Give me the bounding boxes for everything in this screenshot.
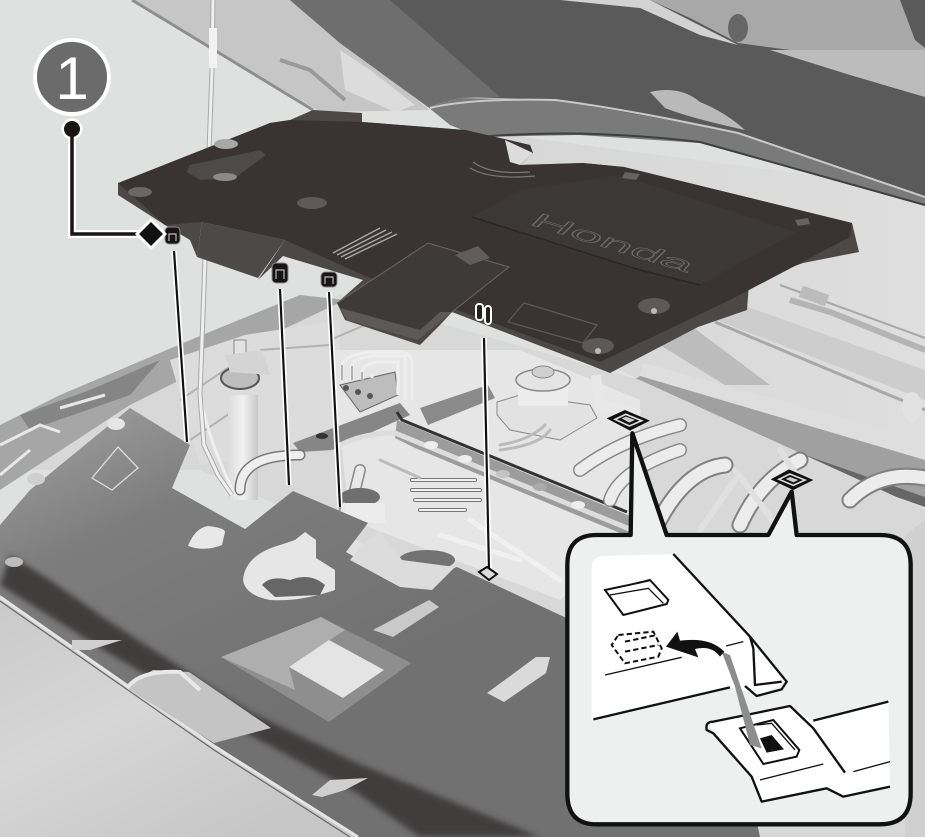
engine bay	[0, 295, 925, 837]
cutout notch	[505, 140, 533, 165]
curved removal arrow	[666, 632, 762, 748]
abs unit	[340, 352, 412, 412]
callout bubble	[567, 433, 911, 824]
embossed square	[92, 447, 138, 490]
arrows: clip guide lines	[174, 251, 497, 580]
brake reservoir	[497, 366, 640, 440]
strut tower	[221, 340, 270, 500]
hood strut rod	[200, 0, 232, 495]
icon: engine bay mounting points	[607, 410, 813, 490]
flap panel	[337, 243, 509, 340]
detail inset callout	[567, 410, 911, 824]
pipes	[200, 395, 925, 720]
clip plate	[706, 702, 890, 802]
callout number badge	[35, 40, 109, 114]
engine cover	[118, 110, 859, 373]
vent slats	[333, 228, 397, 259]
cover holes	[128, 139, 810, 354]
radiator shroud panel	[0, 408, 760, 837]
logo: Honda	[524, 209, 701, 276]
rail frame	[293, 385, 632, 538]
bumper	[0, 590, 360, 837]
cover plate	[592, 554, 787, 720]
raised Honda panel	[472, 175, 796, 285]
leader line with diamond	[62, 118, 167, 250]
windshield and cowl area	[470, 130, 925, 520]
holes in shroud	[5, 418, 550, 797]
cover clips	[165, 227, 491, 324]
callout number badge: 1	[55, 45, 89, 112]
open hood underside	[132, 0, 925, 205]
